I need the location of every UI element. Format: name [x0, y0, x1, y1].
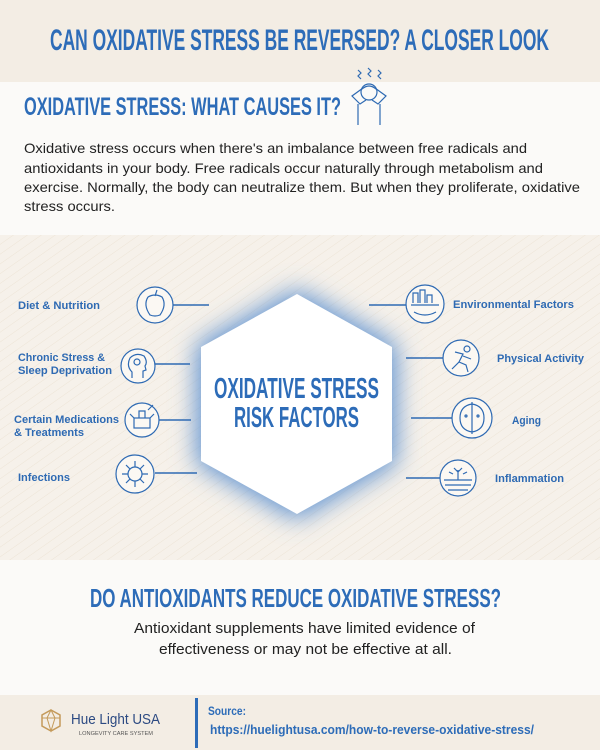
label: medications: & Treatments	[14, 427, 84, 439]
logo: Hue Light USA	[71, 711, 160, 728]
label: medications: Certain Medications	[14, 414, 119, 426]
source: Source:	[208, 704, 246, 718]
section heading: what causes it: OXIDATIVE STRESS: WHAT CAUSES IT?	[24, 93, 341, 121]
white intro band	[0, 82, 600, 235]
divider	[195, 698, 198, 748]
risk factor band	[0, 235, 600, 560]
intro paragraph: Oxidative stress occurs when there's an imbalance between free radicals and	[24, 140, 527, 156]
footer band	[0, 695, 600, 750]
label: physical activity: Physical Activity	[497, 353, 585, 365]
hexagon: risk factors: OXIDATIVE STRESS	[214, 373, 379, 405]
label: aging: Aging	[512, 415, 541, 427]
icon: stressed person	[352, 68, 386, 125]
icon: aging face	[452, 398, 492, 438]
bottom text	[134, 620, 476, 658]
label: infections: Infections	[18, 472, 70, 484]
hexagon: risk factors: RISK FACTORS	[234, 402, 359, 434]
label: environmental: Environmental Factors	[453, 299, 574, 311]
icon: infections virus	[116, 455, 154, 493]
logo: LONGEVITY CARE SYSTEM	[79, 731, 153, 737]
icon: environmental	[406, 285, 444, 323]
label: medications	[14, 414, 119, 439]
white bottom band	[0, 560, 600, 695]
icon: medications	[125, 403, 159, 437]
icon: chronic stress head	[121, 349, 155, 383]
bottom text: effectiveness or may not be effective at all.	[159, 641, 452, 658]
logo	[42, 710, 160, 737]
hexagon: risk factors	[197, 290, 396, 519]
source: https://huelightusa.com/how-to-reverse-oxidative-stress/	[210, 722, 534, 737]
intro paragraph: antioxidants in your body. Free radicals occur naturally through metabolism and	[24, 160, 543, 176]
connector lines	[155, 305, 452, 478]
intro paragraph: exercise. Normally, the body can neutralize them. But when they proliferate, oxidative	[24, 179, 580, 195]
label: chronic stress: Chronic Stress &	[18, 352, 105, 364]
icon: physical activity	[443, 340, 479, 376]
bottom text: Antioxidant supplements have limited evidence of	[134, 620, 476, 637]
icon: inflammation	[440, 460, 476, 496]
icon: diet apple	[137, 287, 173, 323]
top band	[0, 0, 600, 82]
label: chronic stress: Sleep Deprivation	[18, 365, 112, 377]
intro paragraph	[24, 140, 580, 214]
source	[208, 704, 534, 737]
label: inflammation: Inflammation	[495, 473, 564, 485]
intro paragraph: stress occurs.	[24, 198, 115, 214]
label: diet: Diet & Nutrition	[18, 300, 100, 312]
label: chronic stress	[18, 352, 112, 377]
